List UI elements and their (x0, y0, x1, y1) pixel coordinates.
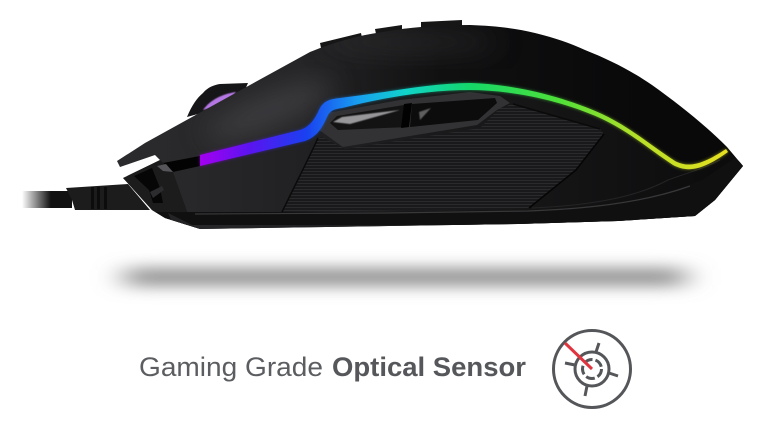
scroll wheel (187, 83, 248, 117)
shell highlight (214, 78, 328, 140)
icon: optical sensor target (554, 330, 630, 408)
rear lower line (532, 160, 720, 208)
caption (139, 352, 526, 382)
front vents (123, 160, 188, 214)
caption: Optical Sensor (332, 352, 526, 382)
mouse body (110, 15, 750, 235)
caption: Gaming Grade (139, 352, 323, 382)
textured side grip (282, 104, 604, 212)
floor shadow (125, 269, 685, 285)
lower body panel (150, 90, 750, 235)
gap under front lip (164, 156, 200, 172)
side buttons (315, 92, 510, 147)
top buttons (320, 20, 462, 48)
mouse cable (22, 184, 150, 210)
base strip (150, 158, 750, 225)
RGB light strip (200, 83, 728, 169)
